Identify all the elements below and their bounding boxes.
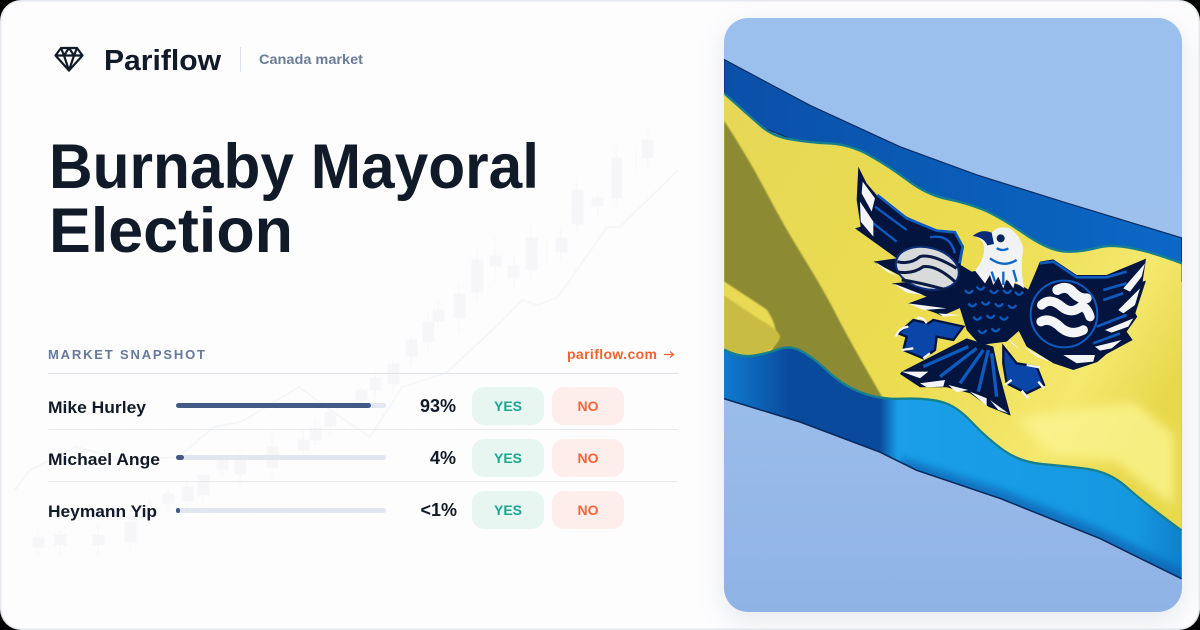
row: Michael Ange: YES (494, 450, 522, 466)
market table (48, 373, 678, 529)
left talon (896, 318, 963, 358)
row: Mike Hurley (48, 387, 624, 425)
row: Michael Ange: 4% (430, 448, 456, 468)
row: Michael Ange: NO (578, 450, 599, 466)
row: Mike Hurley: 93% (420, 396, 456, 416)
logo: diamond icon (56, 48, 82, 70)
top blue band (724, 59, 1182, 281)
row: Michael Ange (48, 439, 624, 477)
flag (724, 59, 1182, 579)
lighter yellow patch in shadow (724, 295, 780, 357)
right wing disc (1031, 281, 1097, 347)
market snapshot heading: MARKET SNAPSHOT (48, 347, 205, 362)
photo panel shadow (724, 26, 1182, 620)
yellow field (724, 93, 1182, 555)
row: Heymann Yip: NO (578, 502, 599, 518)
title: Election (49, 196, 293, 266)
eagle tail (900, 338, 1011, 416)
photo panel: Burnaby flag against sky (724, 18, 1182, 612)
shadow on yellow field (724, 121, 885, 402)
row: Mike Hurley: Mike Hurley (48, 398, 147, 417)
row: Michael Ange: Michael Ange (48, 450, 160, 469)
row: Heymann Yip: YES (494, 502, 522, 518)
divider and market label (240, 47, 363, 72)
bottom hem edge (724, 399, 1182, 579)
row: Heymann Yip: <1% (420, 500, 457, 520)
eagle head (973, 227, 1024, 288)
bottom blue band (724, 347, 1182, 579)
eagle emblem (855, 167, 1146, 416)
fabric highlight (1017, 402, 1173, 506)
row: Mike Hurley: YES (494, 398, 522, 414)
brand name: Pariflow (104, 45, 221, 77)
row: Heymann Yip (48, 491, 624, 529)
teal edge of bottom band (724, 347, 1182, 531)
faint candlestick chart background (15, 132, 678, 555)
divider and market label: Canada market (259, 51, 363, 67)
row: Heymann Yip: Heymann Yip (48, 502, 157, 521)
left wing (855, 167, 972, 317)
right talon (1003, 347, 1044, 398)
site link with arrow: pariflow.com (567, 346, 657, 362)
row: Mike Hurley: NO (578, 398, 599, 414)
title (49, 132, 539, 266)
right wing (1007, 259, 1146, 370)
title: Burnaby Mayoral (49, 132, 539, 202)
left wing disc (894, 246, 960, 291)
bottom hem shading (900, 466, 1182, 579)
eagle body (958, 270, 1029, 345)
teal edge of top band (724, 93, 1182, 263)
